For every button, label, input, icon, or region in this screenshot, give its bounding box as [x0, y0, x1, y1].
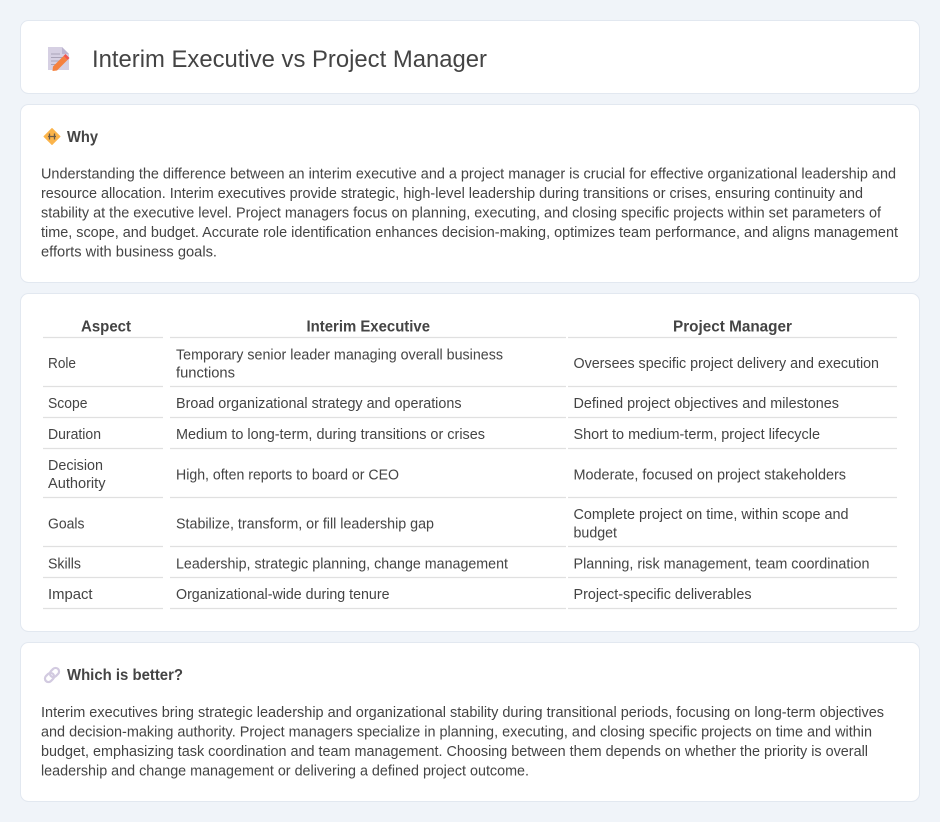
- text block: why paragraph: [41, 166, 898, 260]
- table row: decision authority: Moderate, focused on project stakeholders: [574, 468, 846, 484]
- panel: which is better: [20, 642, 920, 802]
- table row: goals: [43, 507, 897, 546]
- heading: why: Why: [67, 129, 98, 146]
- text block: why paragraph: Understanding the difference between an interim executive and a project manager is crucial for effective organizational leadership and: [41, 166, 896, 182]
- table row: scope: Defined project objectives and milestones: [574, 396, 839, 412]
- table row: impact: Organizational-wide during tenure: [176, 587, 390, 603]
- table row: scope: [43, 396, 897, 418]
- table row: scope: Broad organizational strategy and operations: [176, 396, 462, 412]
- text block: why paragraph: stability at the executive level. Project managers focus on planning, executing, and closing specific projects within set parameters of: [41, 206, 882, 222]
- table header row: Project Manager: [673, 318, 792, 336]
- text block: which is better paragraph: and decision-making authority. Project managers specialize in planning, executing, and closing specific projects on time and within: [41, 724, 872, 740]
- table row: skills: Planning, risk management, team coordination: [574, 556, 870, 572]
- text block: why paragraph: efforts with business goals.: [41, 244, 217, 260]
- table row: goals: budget: [574, 526, 617, 542]
- table row: goals: Stabilize, transform, or fill leadership gap: [176, 516, 434, 532]
- text block: why paragraph: resource allocation. Interim executives provide strategic, high-level leadership during transitions or crises, ensuring continuity and: [41, 186, 863, 202]
- table row: role: [43, 348, 897, 386]
- icon: warning diamond: [44, 128, 60, 144]
- table row: duration: Duration: [48, 427, 101, 443]
- table row: goals: Goals: [48, 516, 84, 532]
- table row: scope: Scope: [48, 396, 88, 412]
- text block: which is better paragraph: budget, emphasizing task coordination and team management. Choosing between them depends on whether the priority is overall: [41, 744, 868, 760]
- table row: role: Oversees specific project delivery and execution: [574, 356, 879, 372]
- table header row: Interim Executive: [306, 318, 430, 336]
- panel: why: [20, 104, 920, 282]
- table row: skills: Leadership, strategic planning, change management: [176, 556, 508, 572]
- table row: role: functions: [176, 366, 235, 382]
- table header row: Aspect: [81, 318, 131, 336]
- table row: impact: Project-specific deliverables: [574, 587, 752, 603]
- icon: document with pencil: [48, 47, 70, 71]
- table row: skills: Skills: [48, 556, 81, 572]
- table row: duration: [43, 427, 897, 448]
- table row: decision authority: [43, 458, 897, 498]
- table row: impact: [43, 587, 897, 608]
- text block: which is better paragraph: [41, 705, 884, 780]
- table row: decision authority: Authority: [48, 476, 106, 492]
- table row: decision authority: Decision: [48, 458, 103, 474]
- table row: impact: Impact: [48, 587, 93, 603]
- table row: goals: Complete project on time, within scope and: [574, 507, 848, 523]
- table header row: [43, 318, 897, 338]
- panel: title card: [20, 20, 920, 94]
- title: Interim Executive vs Project Manager: [92, 46, 487, 73]
- table row: skills: [43, 556, 897, 578]
- heading: which is better: Which is better?: [67, 667, 183, 684]
- icon: chain link: [43, 666, 61, 684]
- table row: duration: Short to medium-term, project lifecycle: [574, 427, 820, 443]
- table row: role: Temporary senior leader managing overall business: [176, 348, 503, 364]
- panel: comparison table: [20, 294, 920, 632]
- text block: which is better paragraph: Interim executives bring strategic leadership and organizational stability during transitional periods, focusing on long-term objectives: [41, 705, 884, 721]
- text block: which is better paragraph: leadership and change management or delivering a defined project outcome.: [41, 764, 529, 780]
- table row: duration: Medium to long-term, during transitions or crises: [176, 427, 485, 443]
- table row: role: Role: [48, 356, 76, 372]
- table row: decision authority: High, often reports to board or CEO: [176, 468, 399, 484]
- text block: why paragraph: time, scope, and budget. Accurate role identification enhances decision-making, optimizes team performance, and aligns management: [41, 225, 898, 241]
